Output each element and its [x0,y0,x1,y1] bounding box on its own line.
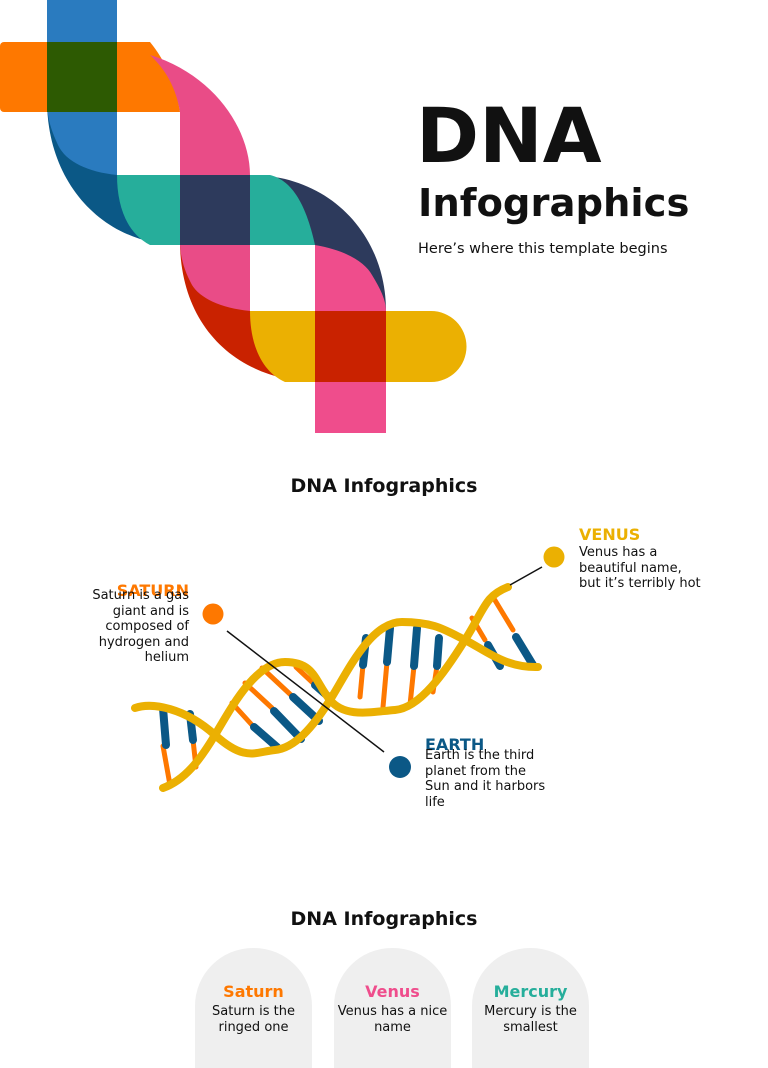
card: saturn [195,948,312,1068]
text: Earth is the third planet from the Sun and it harbors life [425,748,545,810]
chart: dna helix [131,546,564,792]
card: venus: Venus has a nice name [338,1004,447,1034]
callout: venus: VENUS [579,525,640,544]
subtitle: Infographics [418,181,689,226]
heading: section 3: DNA Infographics [291,908,477,930]
heading: section 2: DNA Infographics [291,475,477,497]
tagline: Here’s where this template begins [418,241,668,257]
card: mercury [472,948,589,1068]
card: venus: Venus [365,982,420,1001]
strand B pink band [150,55,320,382]
card: mercury: Mercury is the smallest [484,1004,577,1034]
hero dna ribbon [0,0,466,433]
callout lines [227,567,542,752]
title: DNA [416,91,602,180]
rungs [163,597,533,785]
dots [202,546,564,778]
callout: venus [579,525,701,591]
callout: saturn [92,581,190,665]
strand A blue band [47,0,180,245]
card: saturn: Saturn [223,982,284,1001]
strand A teal band [250,175,466,433]
callout: venus: Venus has a beautiful name, but it’s terribly hot [579,545,701,591]
card: venus [334,948,451,1068]
backbone strands [135,587,538,788]
card: mercury: Mercury [494,982,567,1001]
callout: earth: EARTH [425,735,484,754]
callout: saturn: SATURN [117,581,189,600]
text: Saturn is a gas giant and is composed of hydrogen and helium [92,588,189,665]
strand B orange band [0,42,180,112]
card: saturn: Saturn is the ringed one [212,1004,295,1034]
callout: earth [425,735,545,810]
